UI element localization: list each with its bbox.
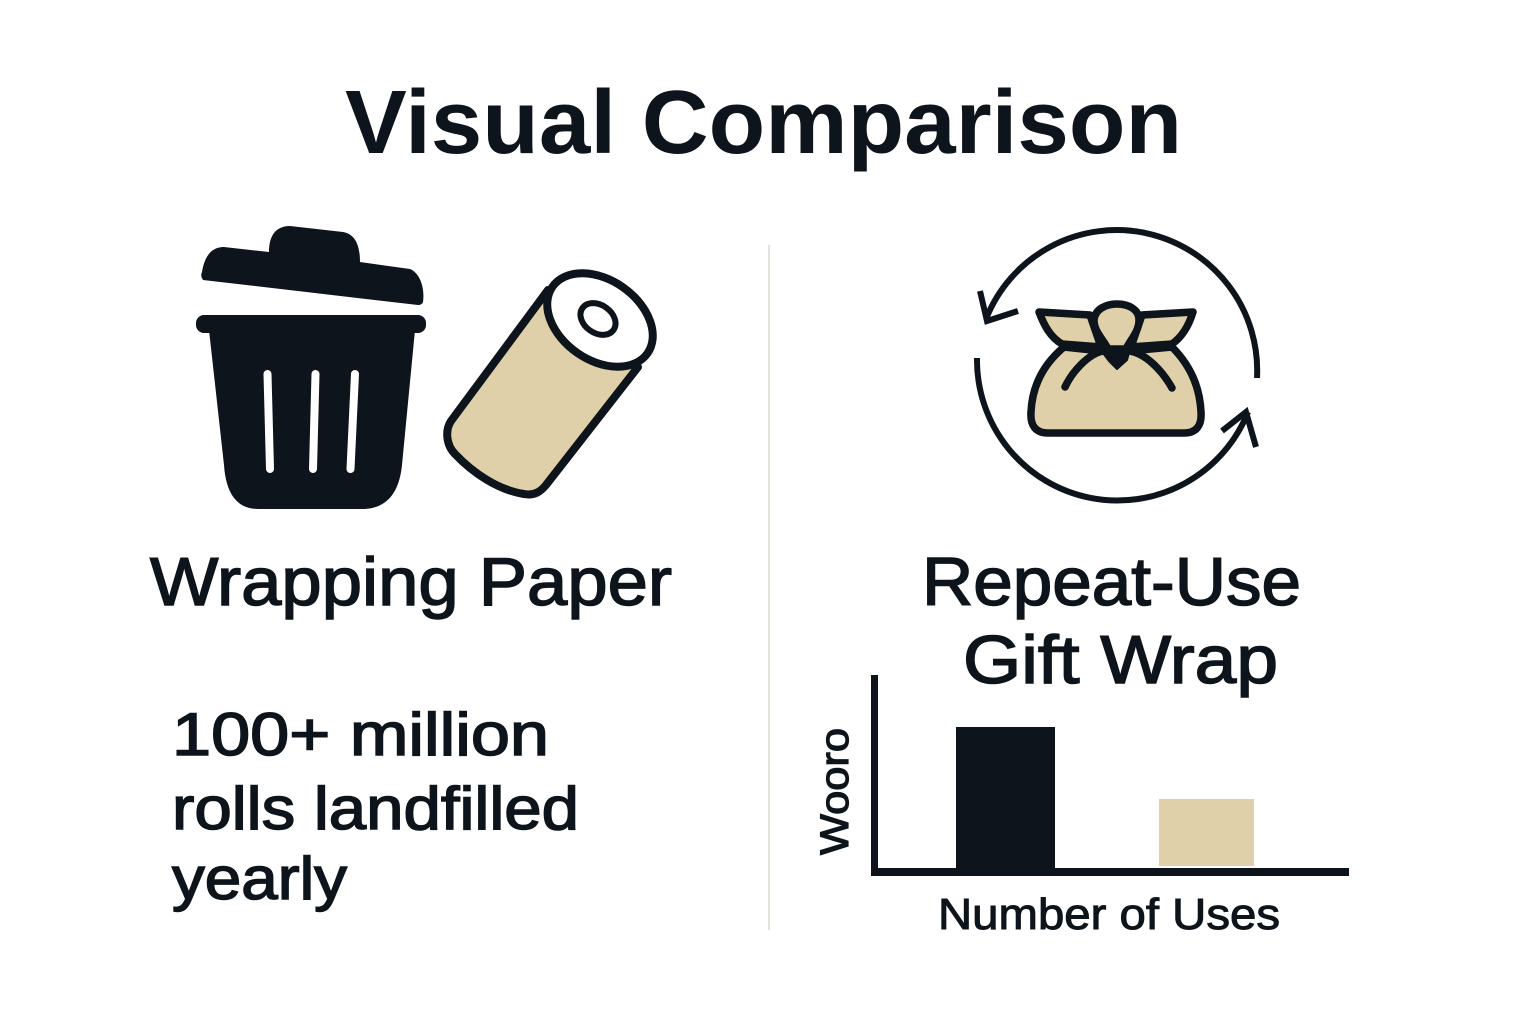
heading: wrapping paper: Wrapping Paper xyxy=(150,544,672,620)
icon: paper roll xyxy=(447,254,670,494)
icon: fabric wrapped bundle xyxy=(1031,304,1201,433)
y axis label: Wooro xyxy=(813,728,857,855)
statistic text: rolls landfilled xyxy=(172,775,579,842)
icon: circular reuse arrows xyxy=(977,230,1257,500)
title: Visual Comparison xyxy=(345,73,1182,173)
bar: wrapping paper xyxy=(956,727,1055,868)
statistic text: yearly xyxy=(172,845,347,912)
statistic text xyxy=(172,701,579,912)
bar: repeat-use wrap xyxy=(1159,799,1254,866)
heading: repeat-use gift wrap: Repeat-Use xyxy=(922,544,1301,620)
bar chart xyxy=(813,675,1349,939)
x axis label: Number of Uses xyxy=(938,890,1280,939)
panel: wrapping paper xyxy=(150,226,672,912)
icon: trash can xyxy=(196,226,426,509)
heading: repeat-use gift wrap: Gift Wrap xyxy=(963,622,1278,698)
statistic text: 100+ million xyxy=(172,701,549,768)
heading: repeat-use gift wrap xyxy=(922,544,1301,698)
panel: repeat-use gift wrap xyxy=(813,230,1349,939)
